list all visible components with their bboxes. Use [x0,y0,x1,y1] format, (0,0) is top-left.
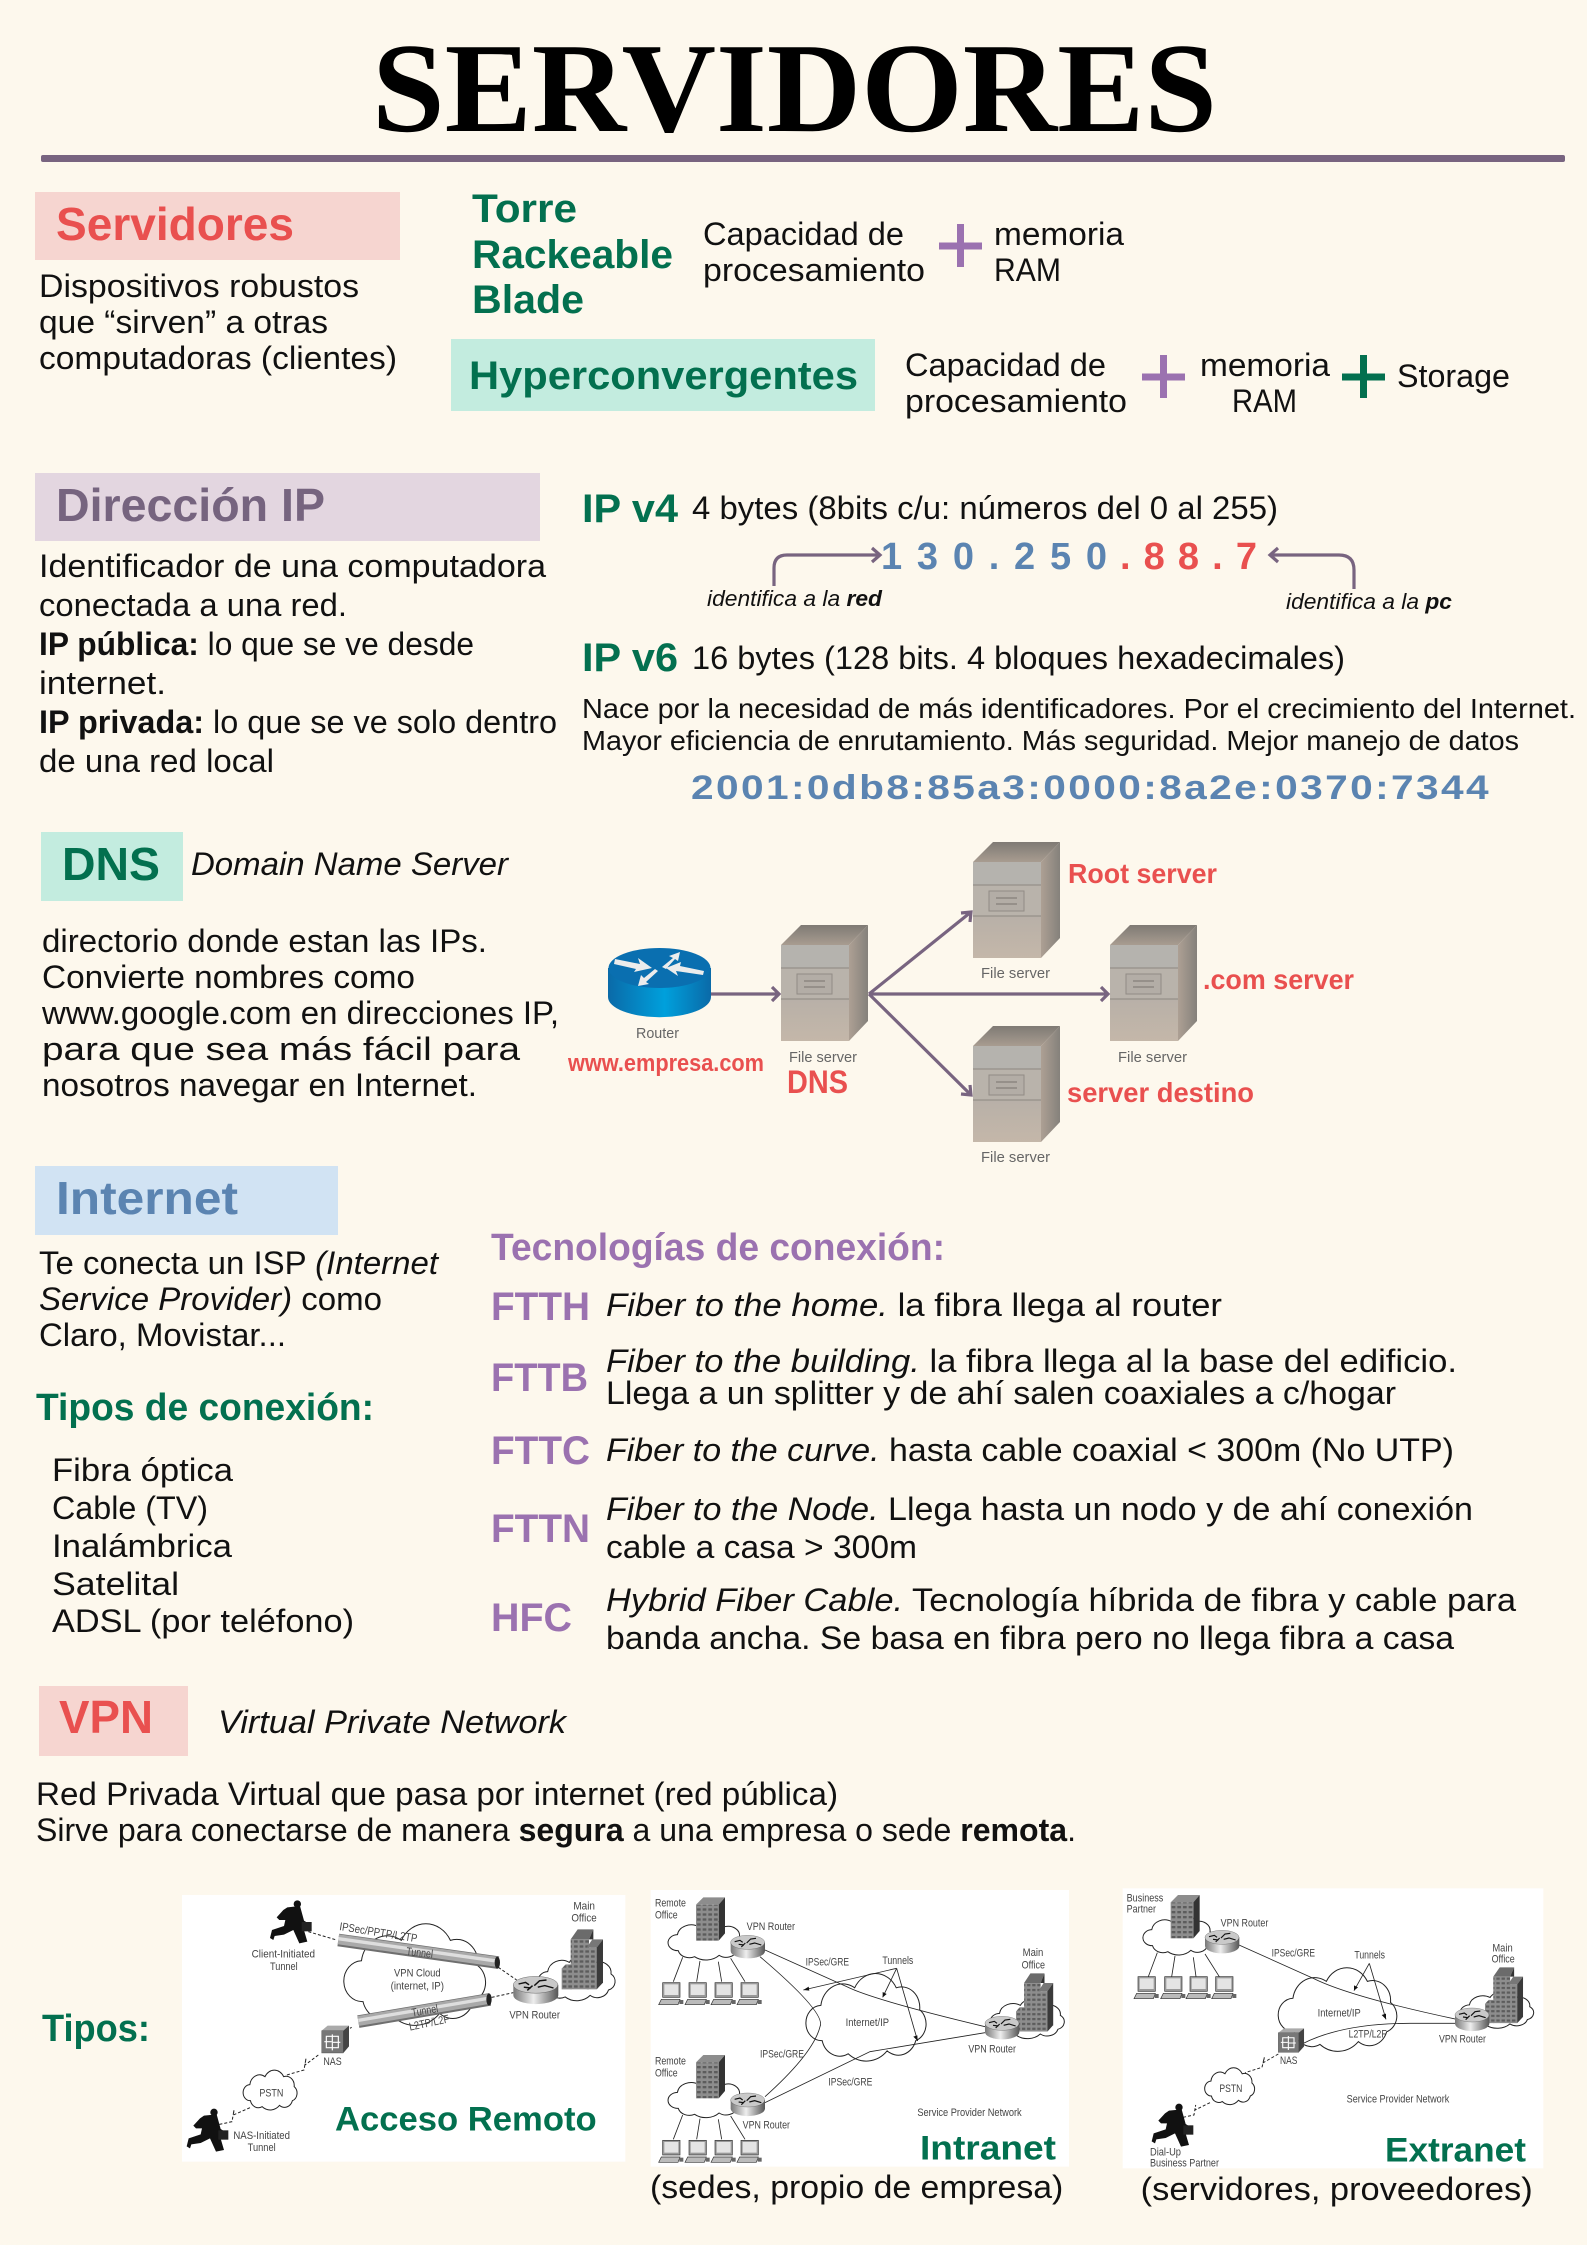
icon: internet cloud [1278,1968,1397,2051]
label: fttn: FTTN [491,1507,590,1551]
label: main office: Office [571,1913,597,1925]
label: pstn: PSTN [259,2088,283,2100]
text: capacidad de procesamiento 2: procesamiento [905,383,1127,419]
text: capacidad de procesamiento 2: Capacidad de [905,347,1106,383]
text: ip definition: IP pública: lo que se ve desde [39,626,474,662]
list: tipos de conexion: Inalámbrica [52,1528,232,1564]
label: ipsec gre: IPSec/GRE [1272,1948,1315,1960]
text: fttb: Fiber to the building. la fibra llega al la base del edificio. [606,1343,1457,1379]
tunnel lines [760,1950,985,2103]
text: fttc: Fiber to the curve. hasta cable coaxial < 300m (No UTP) [606,1432,1454,1468]
diagram: intranet [650,1890,1069,2205]
icon: office cloud [538,1955,615,2001]
text: dns description: para que sea más fácil para [42,1031,520,1067]
text: servidores definition: Dispositivos robustos [39,268,359,304]
text: dns description: www.google.com en direcciones IP, [41,995,559,1031]
label: nas: NAS [323,2056,342,2068]
text: ip definition: conectada a una red. [39,587,347,623]
text: ip v6 description: 16 bytes (128 bits. 4 bloques hexadecimales) [692,640,1345,676]
label: service provider network: Service Provider Network [917,2107,1022,2119]
label: router: Router [636,1025,679,1042]
heading box: dns [41,832,183,901]
list: tipos de conexion: ADSL (por teléfono) [52,1603,354,1639]
label: acceso remoto: Acceso Remoto [335,2101,597,2139]
label: ftth: FTTH [491,1285,590,1329]
arrow: router to dns [711,987,779,1001]
text: servidores definition: que “sirven” a otras [39,304,328,340]
text: fttn: Fiber to the Node. Llega hasta un nodo y de ahí conexión [606,1491,1473,1527]
heading box: direccion ip [35,473,540,541]
tunnel lines [1239,1945,1457,2043]
panel: ip v6 [582,636,1576,807]
label: tunnel top: Tunnel [406,1946,433,1961]
text: memoria RAM 2 [1200,347,1330,419]
label: root server: Root server [1068,858,1217,889]
remote office top [655,1897,795,2005]
business partner office: VPN Router [1221,1918,1269,1930]
text: memoria RAM [994,216,1124,288]
text: capacidad de procesamiento [703,216,925,288]
icon: root server [973,842,1060,958]
text: ip address example [881,536,1257,578]
icon: dns server [781,925,868,1041]
labels: ipsec gre: IPSec/GRE [806,1956,849,1968]
text: ftth: Fiber to the home. la fibra llega al router [606,1287,1222,1323]
panel: dns [41,832,559,1103]
icon: purple plus [939,224,982,267]
text: ip v4 description: 4 bytes (8bits c/u: números del 0 al 255) [692,490,1278,526]
label: fttc: FTTC [491,1429,590,1473]
heading box: hyperconvergentes [451,339,875,411]
heading: direccion ip: Dirección IP [56,479,325,531]
label: client-initiated tunnel [252,1949,315,1973]
label: service provider network: Service Provider Network [1347,2094,1450,2106]
list: torre rackeable blade: Torre [472,187,577,231]
text: servidores definition: computadoras (clientes) [39,340,397,376]
heading: tecnologias de conexion: Tecnologías de conexión: [491,1227,945,1269]
text: ip v6 reasons: Mayor eficiencia de enrutamiento. Más seguridad. Mejor manejo de datos [582,725,1519,756]
label: file server destination: File server [981,1149,1050,1166]
text: fttn [606,1491,1473,1565]
label: file server dns: File server [789,1049,857,1066]
icon: purple plus 2 [1142,355,1185,398]
text: dns description [41,923,559,1103]
label: tunnel bottom: Tunnel [411,2003,439,2020]
remote office top: Remote [655,1898,686,1910]
title: SERVIDORES [372,17,1217,159]
heading: dns: DNS [62,838,160,890]
panel: ip v4 [582,487,1452,614]
business partner office: Partner [1127,1904,1156,1916]
heading: ip v6: IP v6 [582,636,678,680]
icon: pstn cloud [243,2070,297,2110]
label: fttb: FTTB [491,1356,588,1400]
text: domain name server: Domain Name Server [191,846,509,882]
heading: hyperconvergentes: Hyperconvergentes [469,354,858,398]
panel: internet [35,1166,439,1639]
text: ip v6 reasons: Nace por la necesidad de más identificadores. Por el crecimiento del Internet. [582,693,1576,724]
label: dns: DNS [787,1064,848,1100]
text: isp description: Service Provider) como [39,1281,382,1317]
text: ip definition: de una red local [39,743,274,779]
panel: tecnologias de conexion [491,1227,1516,1656]
label: www.empresa.com: www.empresa.com [567,1050,764,1077]
label: nas: NAS [1280,2055,1298,2067]
icon: vpn cloud [344,1924,486,2025]
list: tipos de conexion: Satelital [52,1566,179,1602]
label: l2tp l2f: L2TP/L2F [408,2013,450,2034]
icon: destination server [973,1026,1060,1142]
main office: Main [1492,1942,1513,1954]
text: vpn description [36,1776,1076,1848]
main office: Main [1023,1947,1043,1959]
text: isp description [39,1245,439,1353]
text: ip address example: .88.7 [1120,536,1257,578]
label: ipsec pptp l2tp: IPSec/PPTP/L2TP [339,1921,418,1945]
text: dns description: nosotros navegar en Internet. [42,1067,477,1103]
label: nas-initiated tunnel [233,2130,290,2154]
heading: servidores: Servidores [56,198,294,250]
list: tipos de conexion [52,1452,354,1639]
list: torre rackeable blade: Rackeable [472,233,673,277]
text: vpn description: Red Privada Virtual que pasa por internet (red pública) [36,1776,838,1812]
label: client-initiated tunnel: Tunnel [270,1961,298,1973]
text: vpn description: Sirve para conectarse de manera segura a una empresa o sede remota. [36,1812,1076,1848]
label: extranet: Extranet [1385,2132,1526,2170]
arrow: dns to root [869,912,971,994]
remote office bottom: Remote [655,2055,686,2067]
main office: Office [1022,1959,1045,1971]
text: memoria RAM 2: memoria [1200,347,1330,383]
text: ip v6 reasons [582,693,1576,756]
text: memoria RAM: memoria [994,216,1124,252]
text: fttb: Llega a un splitter y de ahí salen coaxiales a c/hogar [606,1375,1396,1411]
icon: client person [270,1900,312,1943]
text: hfc: banda ancha. Se basa en fibra pero no llega fibra a casa [606,1620,1454,1656]
icon: top tunnel [338,1939,500,1969]
remote office bottom [655,2055,790,2162]
main office [1439,1942,1534,2046]
arrow: dns to com [869,987,1108,1001]
heading: internet: Internet [56,1172,238,1224]
heading: ip v4: IP v4 [582,487,679,531]
text: isp description: Te conecta un ISP (Internet [39,1245,439,1281]
text: hfc [606,1582,1516,1656]
text: dns description: directorio donde estan las IPs. [42,923,487,959]
label: file server com: File server [1118,1049,1187,1066]
label: tipos: Tipos: [42,2008,150,2050]
list: torre rackeable blade: Blade [472,278,584,322]
icon: main office building [562,1929,603,1989]
label: server destino: server destino [1067,1077,1254,1108]
label: vpn router: VPN Router [509,2010,560,2022]
labels: ipsec gre [760,1956,873,2089]
icon: vpn router [513,1976,558,2004]
icon: nas [322,2026,349,2053]
label: com server: .com server [1203,964,1354,995]
text: fttn: cable a casa > 300m [606,1529,917,1565]
label: tunnels: Tunnels [1354,1950,1385,1962]
text: memoria RAM: RAM [994,252,1061,288]
label: dial-up business partner [1150,2146,1219,2170]
diagram: acceso remoto [182,1895,625,2162]
icon: dial-up person [1152,2104,1193,2147]
label: main office [571,1900,597,1925]
label: tunnels: Tunnels [882,1955,914,1967]
heading: tipos de conexion: Tipos de conexión: [36,1387,374,1429]
remote office bottom: VPN Router [743,2119,790,2131]
icon: com server [1110,925,1197,1041]
text: capacidad de procesamiento: procesamiento [703,252,925,288]
heading box: internet [35,1166,338,1235]
main office: VPN Router [968,2044,1016,2056]
text: ip address example: 130.250 [881,536,1107,578]
label: file server root: File server [981,965,1050,982]
icon: green plus [1342,355,1385,398]
heading box: vpn [39,1686,188,1756]
icon: pstn cloud [1205,2068,1255,2105]
remote office top: Office [655,1910,678,1922]
label: internet ip: Internet/IP [846,2017,889,2029]
panel: direccion ip [35,473,557,779]
remote office top: VPN Router [747,1921,795,1933]
labels: ipsec gre: IPSec/GRE [828,2077,873,2089]
text: sedes propio de empresa: (sedes, propio de empresa) [650,2169,1063,2205]
main office: VPN Router [1439,2034,1486,2046]
label: client-initiated tunnel: Client-Initiated [252,1949,315,1961]
label: nas-initiated tunnel: NAS-Initiated [233,2130,290,2142]
label: dial-up business partner: Business Partner [1150,2158,1219,2170]
label: main office: Main [573,1900,595,1912]
panel: server types [451,187,1510,419]
text: capacidad de procesamiento: Capacidad de [703,216,904,252]
icon: internet cloud [806,1973,926,2061]
icon: nas [1278,2028,1304,2052]
business partner office: Business [1127,1893,1164,1905]
heading box: servidores [35,192,400,260]
text: virtual private network: Virtual Private Network [218,1704,568,1740]
panel: vpn [36,1686,1076,2050]
list: torre rackeable blade [472,187,673,322]
business partner office [1127,1893,1269,1999]
labels: ipsec gre: IPSec/GRE [760,2049,804,2061]
main office: Office [1492,1954,1515,1966]
arrow: dns to destination [869,994,971,1095]
diagram: extranet [1123,1888,1543,2207]
text: isp description: Claro, Movistar... [39,1317,286,1353]
text: storage: Storage [1397,358,1510,394]
list: tipos de conexion: Fibra óptica [52,1452,233,1488]
label: vpn cloud: (internet, IP) [391,1980,444,1992]
text: identifica a la pc: identifica a la pc [1286,589,1452,614]
icon: nas person [187,2109,228,2152]
label: pstn: PSTN [1219,2083,1242,2095]
label: intranet: Intranet [920,2129,1056,2167]
text: servidores definition [39,268,397,376]
heading: vpn: VPN [59,1691,153,1743]
text: dns description: Convierte nombres como [42,959,415,995]
text: ip definition [39,548,557,779]
arrow: host part [1270,548,1354,589]
text: fttb [606,1343,1457,1411]
icon: bottom tunnel [358,1993,492,2022]
icon: router [608,948,711,1017]
remote office bottom: Office [655,2067,678,2079]
text: ip definition: IP privada: lo que se ve solo dentro [39,704,557,740]
label: hfc: HFC [491,1596,572,1640]
text: servidores proveedores: (servidores, proveedores) [1141,2171,1533,2207]
text: ip v6 address: 2001:0db8:85a3:0000:8a2e:0370:7344 [691,769,1491,807]
text: hfc: Hybrid Fiber Cable. Tecnología híbrida de fibra y cable para [606,1582,1516,1618]
label: dial-up business partner: Dial-Up [1150,2146,1181,2158]
arrow: network part [774,548,880,586]
text: identifica a la red: identifica a la red [707,586,883,611]
text: ip definition: internet. [39,665,166,701]
main office [968,1947,1064,2056]
text: ip definition: Identificador de una computadora [39,548,546,584]
label: nas-initiated tunnel: Tunnel [248,2142,276,2154]
dns diagram [567,842,1354,1166]
label: vpn cloud: VPN Cloud [394,1968,441,1980]
label: internet ip: Internet/IP [1318,2008,1361,2020]
list: tipos de conexion: Cable (TV) [52,1490,208,1526]
panel: servidores [35,192,400,376]
label: l2tp l2f: L2TP/L2F [1349,2029,1387,2041]
text: capacidad de procesamiento 2 [905,347,1127,419]
text: memoria RAM 2: RAM [1232,383,1297,419]
label: vpn cloud [391,1968,444,1992]
